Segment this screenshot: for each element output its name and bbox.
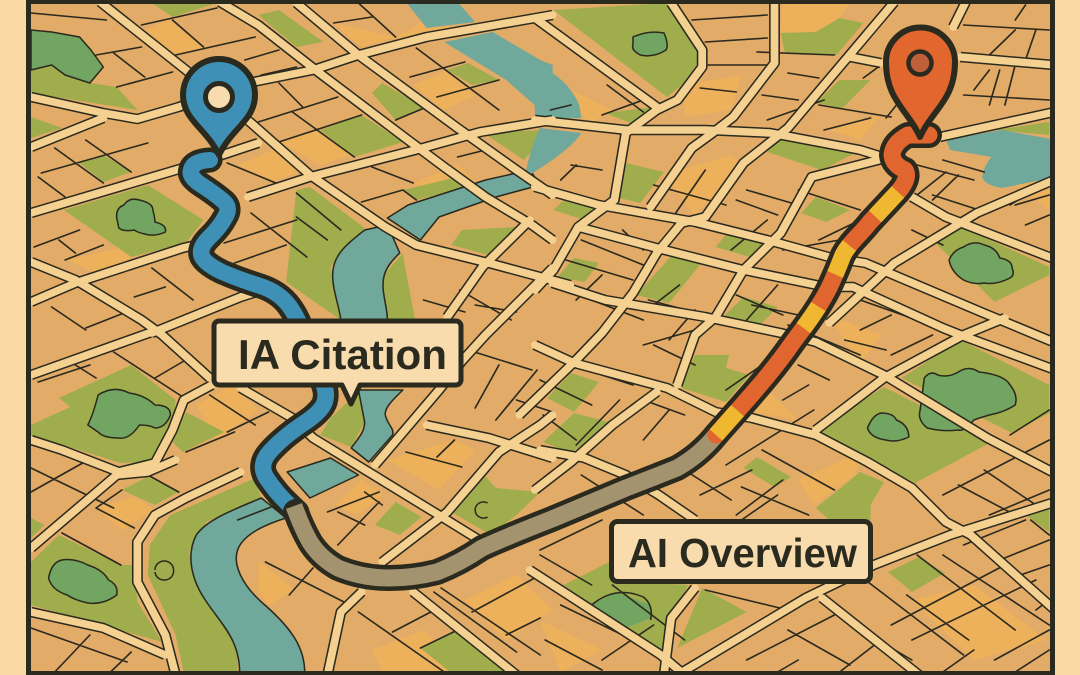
callout: AI Overview: AI Overview xyxy=(628,530,857,576)
callout: AI Overview xyxy=(612,522,870,582)
icon: blue start pin xyxy=(183,59,255,155)
map fills: parks, blocks and water (right half) xyxy=(525,3,1057,672)
route: blue citation path xyxy=(191,160,326,512)
icon: red destination pin xyxy=(886,28,955,137)
callout: IA Citation: IA Citation xyxy=(238,331,447,378)
page margin, right xyxy=(1053,0,1080,675)
callout: IA Citation xyxy=(214,321,461,404)
route: AI Overview path, grey and coloured xyxy=(294,135,929,578)
map fills: parks, blocks and water (left half) xyxy=(31,2,553,673)
